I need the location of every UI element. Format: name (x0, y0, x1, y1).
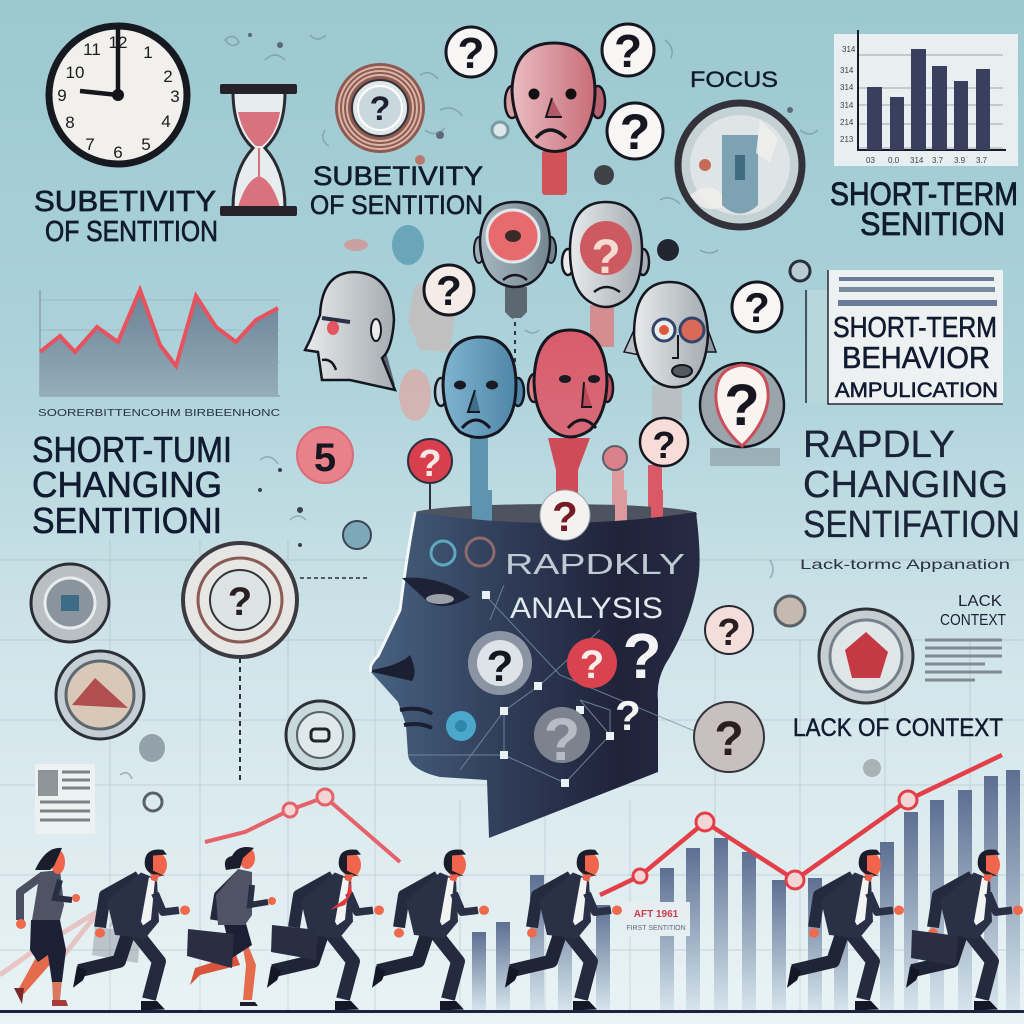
clock: 3 (170, 87, 180, 106)
main head silhouette (370, 490, 704, 838)
red target icon (819, 609, 913, 703)
bar chart: short-term: 314 (840, 83, 854, 92)
left dial icon (31, 564, 109, 642)
clock: 10 (66, 63, 84, 82)
clock: 1 (143, 43, 153, 62)
icon: pink head (505, 43, 605, 195)
bar chart: short-term: 3.7 (976, 156, 988, 165)
heading: subjectivity centre: OF SENTITION (310, 190, 483, 220)
main head silhouette: ? (544, 706, 580, 773)
clock: 5 (141, 135, 151, 154)
bar chart: short-term: 314 (842, 45, 856, 54)
icon: question face head (562, 202, 649, 347)
chart caption box: FIRST SENTITION (626, 925, 686, 932)
icon: head with large question: ? (724, 373, 760, 438)
runner: man three (372, 850, 489, 1010)
heading: short-term sentition: SENITION (860, 206, 1005, 242)
runners (14, 847, 1023, 1010)
heading: lack of context: LACK OF CONTEXT (793, 714, 1003, 742)
question badge on head rim: ? (552, 493, 578, 540)
heading: rapidly changing (803, 424, 1020, 546)
runner: man six (906, 850, 1023, 1010)
question badges (297, 24, 782, 520)
clock: 4 (161, 112, 171, 131)
scattered decorative marks (120, 33, 881, 811)
chart caption box: AFT 1961 (634, 909, 679, 920)
heading: subjectivity left (34, 186, 218, 248)
heading: subjectivity centre (310, 161, 483, 220)
question badge: ? (436, 267, 462, 314)
line chart: sentiment (40, 290, 280, 396)
heading: short-term sentition (830, 176, 1018, 242)
hourglass (220, 84, 297, 216)
runner: man with light case (73, 850, 190, 1010)
ground line (0, 1010, 1024, 1013)
icon: red head (528, 330, 613, 520)
main head silhouette: ? (615, 692, 641, 739)
clock (49, 26, 187, 164)
icon: faint profile head (408, 282, 456, 352)
heading: rapidly changing: CHANGING (803, 464, 1008, 506)
panel: short-term behavior amplification (790, 261, 1003, 404)
main head silhouette: ? (580, 643, 604, 687)
runner: woman two (187, 847, 276, 1006)
panel: short-term behavior amplification: BEHAVIOR (842, 340, 990, 375)
panel: short-term behavior amplification: AMPULICATION (835, 379, 998, 402)
bottom bar chart (472, 770, 1020, 1010)
icon: head with large question (700, 363, 784, 466)
icon: blue head (435, 337, 524, 520)
icon: grey head with glasses (624, 282, 716, 420)
heading: short-term changing: SENTITIONI (32, 500, 222, 541)
bar chart: short-term (834, 30, 1018, 166)
main head silhouette: ? (487, 642, 513, 691)
runner: man four (505, 850, 622, 1010)
red trend line (0, 755, 1002, 975)
runner: man with case (267, 850, 384, 1010)
label: lack context: LACK (958, 593, 1002, 610)
magnifier (678, 103, 802, 227)
ring icon (286, 701, 354, 769)
question badges: ? (620, 104, 650, 160)
heading: short-term changing: CHANGING (32, 464, 222, 505)
bar chart: short-term: 314 (910, 156, 924, 165)
bar chart: short-term: 3.7 (932, 156, 944, 165)
panel: short-term behavior amplification: SHORT-TERM (833, 312, 997, 344)
small question badges right (694, 596, 805, 772)
spiral question badge (335, 63, 425, 153)
target question badge: ? (228, 580, 252, 624)
small question badges right: ? (714, 713, 744, 766)
runner: woman one (14, 848, 80, 1006)
clock: 9 (57, 86, 67, 105)
clock: 7 (85, 135, 95, 154)
question badges: ? (652, 425, 676, 467)
caption: lack-term: Lack-tormc Appanation (800, 556, 1010, 572)
main head silhouette: ANALYSIS (510, 592, 663, 625)
chart caption box (622, 902, 690, 936)
icon: cyclops grey head (474, 202, 556, 380)
heading: rapidly changing: RAPDLY (803, 424, 955, 466)
question badges: 5 (314, 436, 336, 480)
question badge on head rim (540, 490, 590, 540)
small question badges right: ? (717, 612, 741, 654)
heading: subjectivity centre: SUBETIVITY (313, 161, 483, 191)
chart caption: SOORERBITTENCOHM BIRBEENHONC (38, 407, 281, 419)
label: focus: FOCUS (690, 67, 778, 92)
clock: 8 (65, 113, 75, 132)
question badges: ? (744, 284, 770, 331)
target question badge (183, 543, 370, 780)
heading: subjectivity left: OF SENTITION (45, 216, 218, 248)
heading: short-term changing: SHORT-TUMI (32, 429, 232, 470)
clock: 2 (163, 67, 173, 86)
document icon (35, 764, 95, 834)
ring icon with scene (56, 651, 144, 739)
runner: man five (787, 850, 904, 1010)
bar chart: short-term: 213 (840, 135, 854, 144)
question badges: ? (458, 29, 484, 78)
bar chart: short-term: 3.9 (954, 156, 966, 165)
clock: 11 (83, 40, 101, 59)
bar chart: short-term: 214 (840, 118, 854, 127)
heading: short-term changing (32, 429, 232, 541)
question badges: ? (614, 25, 642, 77)
bar chart: short-term: 314 (840, 66, 854, 75)
heading: subjectivity left: SUBETIVITY (34, 186, 216, 218)
clock: 12 (109, 33, 127, 52)
bar chart: short-term: 03 (866, 156, 875, 165)
bar chart: short-term: 314 (840, 101, 854, 110)
spiral question badge: ? (370, 90, 390, 128)
question badges: ? (418, 443, 442, 485)
main head silhouette: ? (622, 620, 662, 692)
label: lack context: CONTEXT (940, 612, 1006, 629)
bar chart: short-term: 0.0 (888, 156, 900, 165)
clock: 6 (113, 143, 123, 162)
icon: profile head (305, 272, 395, 390)
question badge (424, 265, 474, 315)
main head silhouette: RAPDKLY (505, 549, 685, 581)
label: lack context (925, 593, 1006, 680)
icon: question face head: ? (591, 231, 621, 284)
